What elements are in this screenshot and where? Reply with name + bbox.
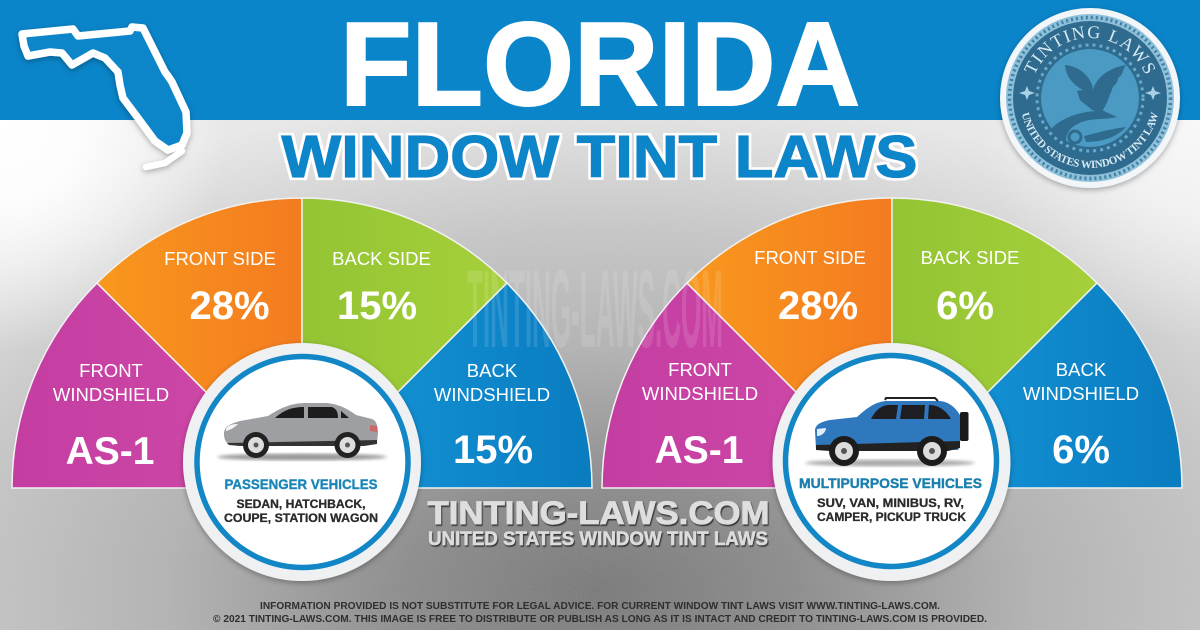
labels: multipurpose fan: AS-1 xyxy=(655,429,743,472)
labels: multipurpose fan: BACK SIDE xyxy=(921,247,1019,268)
labels: multipurpose fan: 6% xyxy=(1052,428,1110,472)
segment: back windshield xyxy=(302,283,592,488)
labels: passenger fan: 15% xyxy=(453,428,533,472)
labels: passenger fan: 15% xyxy=(337,284,417,328)
labels: multipurpose fan: 28% xyxy=(778,284,858,328)
labels: passenger fan: WINDSHIELD xyxy=(53,384,169,405)
labels: multipurpose fan: FRONT xyxy=(668,359,732,380)
icon: Florida state outline xyxy=(22,27,187,167)
brand: TINTING-LAWS.COM: TINTING-LAWS.COM xyxy=(428,495,770,531)
brand tagline: UNITED STATES WINDOW TINT LAWS xyxy=(428,528,768,550)
title: FLORIDA: FLORIDA xyxy=(340,0,860,131)
icon: SUV xyxy=(805,398,975,466)
panel: multipurpose vehicles fan xyxy=(602,198,1182,488)
segment: back windshield xyxy=(892,283,1182,488)
labels: multipurpose fan: BACK xyxy=(1056,359,1107,380)
labels: passenger fan: FRONT SIDE xyxy=(164,248,276,269)
labels: multipurpose fan: FRONT SIDE xyxy=(754,247,866,268)
subtitle: WINDOW TINT LAWS: WINDOW TINT LAWS xyxy=(282,124,918,190)
badge: passenger vehicles xyxy=(183,343,421,581)
labels: multipurpose fan xyxy=(642,247,1139,472)
text: sedan list line 1: SEDAN, HATCHBACK, xyxy=(236,497,366,511)
text: sedan list line 2: COUPE, STATION WAGON xyxy=(224,511,378,525)
segment: back side xyxy=(302,198,507,488)
seal stars xyxy=(1019,86,1161,100)
heading: multipurpose vehicles: MULTIPURPOSE VEHICLES xyxy=(799,475,982,491)
disclaimer line 1: INFORMATION PROVIDED IS NOT SUBSTITUTE FOR LEGAL ADVICE. FOR CURRENT WINDOW TINT LAWS VISIT WWW.TINTING-LAWS.COM. xyxy=(260,600,940,612)
panel: passenger vehicles fan xyxy=(12,198,592,488)
icon: sedan car xyxy=(217,403,387,460)
labels: passenger fan xyxy=(53,248,550,473)
seal: Tinting Laws emblem xyxy=(997,7,1183,193)
disclaimer line 2: © 2021 TINTING-LAWS.COM. THIS IMAGE IS FREE TO DISTRIBUTE OR PUBLISH AS LONG AS IT IS INTACT AND CREDIT TO TINTING-LAWS.COM IS PROVIDED. xyxy=(213,613,987,625)
segment: front side xyxy=(97,198,302,488)
labels: passenger fan: WINDSHIELD xyxy=(434,384,550,405)
labels: passenger fan: BACK SIDE xyxy=(332,248,431,269)
labels: multipurpose fan: 6% xyxy=(936,284,994,328)
seal top text: TINTING LAWS xyxy=(1024,26,1156,74)
seal bottom text: UNITED STATES WINDOW TINT LAW xyxy=(1022,112,1158,168)
segment: front windshield xyxy=(12,283,302,488)
icon: eagle xyxy=(1052,65,1126,143)
labels: passenger fan: 28% xyxy=(189,284,270,328)
text: SUV list line 1: SUV, VAN, MINIBUS, RV, xyxy=(817,496,964,510)
segment: front side xyxy=(687,198,892,488)
labels: multipurpose fan: WINDSHIELD xyxy=(642,383,758,404)
segment: front windshield xyxy=(602,283,892,488)
labels: multipurpose fan: WINDSHIELD xyxy=(1023,383,1139,404)
labels: passenger fan: FRONT xyxy=(79,360,143,381)
labels: passenger fan: BACK xyxy=(467,360,518,381)
text: SUV list line 2: CAMPER, PICKUP TRUCK xyxy=(817,510,966,524)
top blue band xyxy=(0,0,1200,120)
heading: passenger vehicles: PASSENGER VEHICLES xyxy=(224,476,378,492)
labels: passenger fan: AS-1 xyxy=(66,430,154,473)
segment: back side xyxy=(892,198,1097,488)
watermark: TINTING-LAWS.COM xyxy=(467,247,723,371)
badge: multipurpose vehicles xyxy=(772,343,1010,581)
